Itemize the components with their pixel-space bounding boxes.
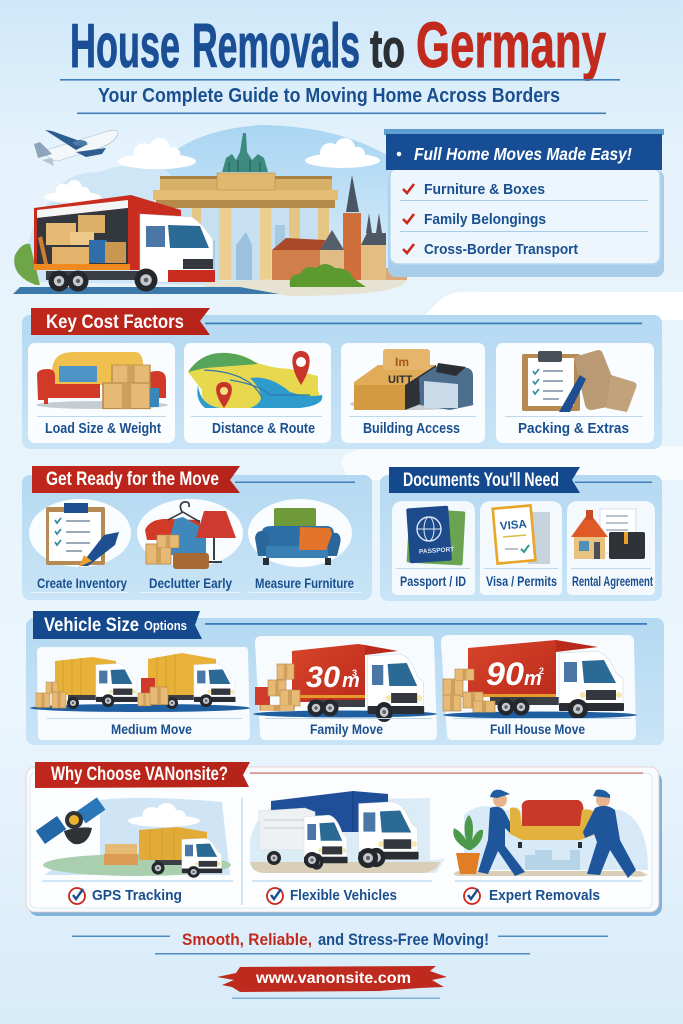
website badge — [217, 966, 447, 992]
card: building access — [341, 343, 485, 443]
card: family move — [253, 636, 437, 740]
heading banner — [32, 466, 240, 493]
card: passport: PASSPORT — [419, 546, 455, 556]
tagline: Smooth, Reliable, — [182, 930, 312, 949]
hero illustration — [13, 125, 407, 296]
heading banner — [31, 308, 210, 335]
title rule — [60, 79, 620, 81]
icon: moving truck — [34, 195, 215, 292]
card: visa: VISA — [500, 519, 527, 533]
icon: shrub left — [14, 244, 40, 285]
item: gps tracking — [36, 797, 233, 904]
divider — [242, 798, 243, 905]
panel: vehicle size options — [26, 611, 664, 745]
yellow truck — [139, 827, 222, 878]
capacity label — [486, 656, 544, 692]
icon: airplane — [34, 130, 118, 166]
card: building access: Im — [395, 355, 409, 369]
heading banner: Key Cost Factors — [46, 312, 184, 333]
card: medium move: Medium Move — [111, 721, 192, 737]
capacity label: m — [524, 668, 542, 690]
panel header — [386, 134, 662, 170]
heading banner: Options — [144, 618, 187, 633]
card: rental agreement — [567, 501, 655, 595]
capacity label: m — [342, 670, 360, 692]
item: measure furniture: Measure Furniture — [255, 575, 354, 591]
heading banner: Vehicle Size — [44, 615, 139, 636]
card: load size: Load Size & Weight — [45, 420, 161, 437]
card: load size — [28, 343, 175, 443]
capacity label: 3 — [352, 668, 357, 678]
panel header: Full Home Moves Made Easy! — [414, 144, 632, 164]
card: passport — [392, 501, 475, 595]
panel: full home moves — [384, 129, 664, 277]
gps label: GPS Tracking — [92, 887, 182, 904]
icon: Brandenburg Gate — [153, 133, 338, 280]
heading banner: Documents You'll Need — [403, 470, 559, 491]
card: distance and route: Distance & Route — [212, 420, 315, 437]
card: family move: Family Move — [310, 721, 383, 737]
item: expert removals — [453, 790, 648, 904]
icon: bush — [290, 264, 366, 287]
check list: Furniture & Boxes — [424, 181, 545, 198]
item: create inventory: Create Inventory — [37, 575, 127, 591]
check list: Cross-Border Transport — [424, 241, 578, 258]
heading banner — [35, 762, 250, 788]
heading banner: Why Choose VANonsite? — [51, 764, 228, 785]
subtitle: Your Complete Guide to Moving Home Across Borders — [98, 85, 560, 107]
expert label: Expert Removals — [489, 887, 600, 904]
icon: plant — [453, 815, 483, 874]
ground shadow — [13, 287, 279, 294]
title: House — [70, 12, 180, 81]
card: visa: Visa / Permits — [486, 573, 557, 589]
card: full house move — [441, 635, 637, 740]
heading banner: Get Ready for the Move — [46, 469, 219, 490]
item: declutter early — [137, 499, 243, 593]
icon: old town buildings — [272, 175, 407, 280]
website badge: www.vanonsite.com — [255, 970, 411, 987]
tagline — [72, 930, 608, 954]
card: packing and extras — [496, 343, 654, 443]
heading banner — [389, 467, 580, 493]
panel: documents you'll need — [380, 467, 662, 601]
panel: why choose vanonsite — [26, 762, 662, 916]
card: packing and extras: Packing & Extras — [518, 420, 629, 437]
title: to — [370, 19, 405, 79]
card: building access: Building Access — [363, 420, 460, 437]
title — [70, 9, 606, 81]
truck two — [138, 653, 236, 709]
flexible label: Flexible Vehicles — [290, 887, 397, 904]
tagline: and Stress-Free Moving! — [318, 930, 489, 949]
title: Removals — [192, 12, 360, 81]
sky and clouds — [26, 125, 392, 285]
icon: sofa — [510, 800, 594, 848]
check list — [400, 181, 648, 258]
check list: Family Belongings — [424, 211, 546, 228]
subtitle rule — [77, 112, 606, 114]
card: distance and route — [184, 343, 331, 443]
item: measure furniture — [248, 499, 361, 593]
left mover — [478, 790, 525, 876]
card: visa — [480, 501, 562, 595]
capacity label — [306, 661, 360, 694]
truck one — [36, 657, 138, 709]
heading banner — [33, 611, 202, 639]
right mover — [583, 790, 636, 878]
ground — [205, 279, 407, 296]
card: passport: Passport / ID — [400, 573, 466, 589]
item: create inventory — [29, 499, 131, 593]
card: medium move — [30, 647, 250, 740]
capacity label: 90 — [486, 656, 524, 692]
panel: get ready for the move — [22, 466, 372, 600]
icon: satellite — [36, 797, 105, 844]
capacity label: 2 — [539, 666, 544, 676]
card: building access: UITT — [388, 374, 413, 386]
panel: key cost factors — [22, 308, 662, 449]
capacity label: 30 — [306, 661, 340, 694]
website rule — [232, 998, 440, 999]
item: declutter early: Declutter Early — [149, 575, 232, 591]
item: flexible vehicles — [250, 791, 445, 904]
card: full house move: Full House Move — [490, 721, 585, 737]
